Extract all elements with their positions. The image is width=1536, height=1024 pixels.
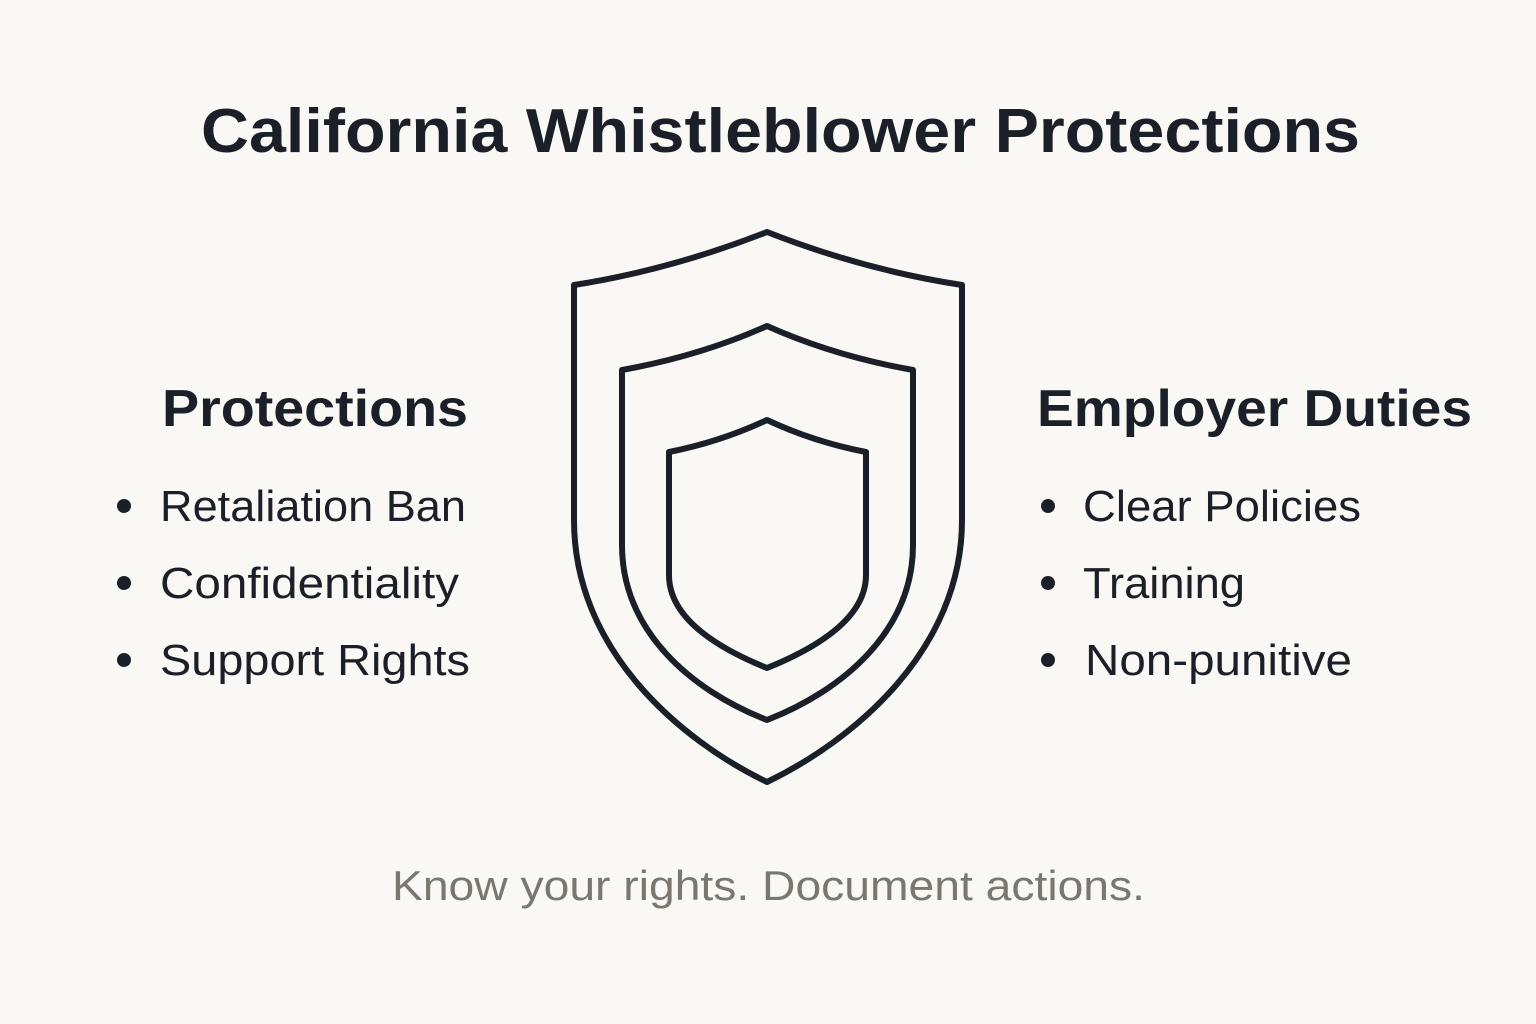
list: protections items — [117, 482, 470, 685]
heading: protections: Protections — [162, 380, 468, 438]
list: employer duties items — [1041, 482, 1361, 685]
panel: protections — [117, 380, 470, 685]
list: employer duties items: Non-punitive — [1085, 636, 1352, 685]
icon: nested shield — [574, 232, 962, 782]
heading: employer duties: Employer Duties — [1037, 380, 1472, 438]
list: protections items: Retaliation Ban — [160, 482, 466, 531]
list: protections items: Support Rights — [160, 636, 470, 685]
panel: employer duties — [1037, 380, 1472, 685]
footer tagline: Know your rights. Document actions. — [392, 862, 1145, 909]
list: employer duties items: Clear Policies — [1083, 482, 1361, 531]
list: employer duties items: Training — [1083, 559, 1245, 608]
title: California Whistleblower Protections — [201, 97, 1360, 166]
list: protections items: Confidentiality — [160, 559, 459, 608]
